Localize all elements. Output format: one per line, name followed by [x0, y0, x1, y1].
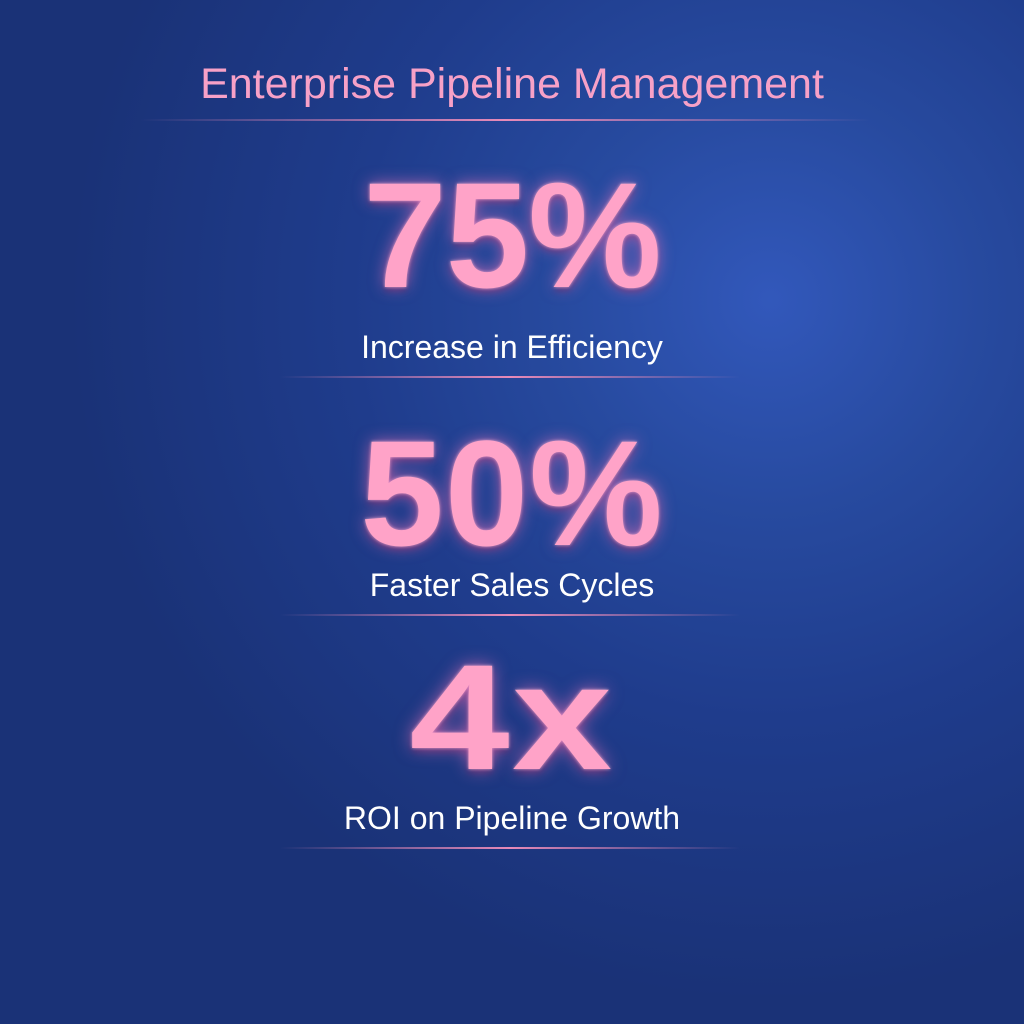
- label: efficiency: Increase in Efficiency: [361, 329, 663, 365]
- label: ROI: ROI on Pipeline Growth: [344, 800, 680, 836]
- stat: 50%: 50%: [360, 409, 664, 577]
- title: Enterprise Pipeline Management: [200, 60, 824, 108]
- stat: 4x: 4x: [409, 633, 615, 801]
- stat: 75%: 75%: [363, 151, 661, 319]
- label: faster sales: Faster Sales Cycles: [370, 567, 654, 603]
